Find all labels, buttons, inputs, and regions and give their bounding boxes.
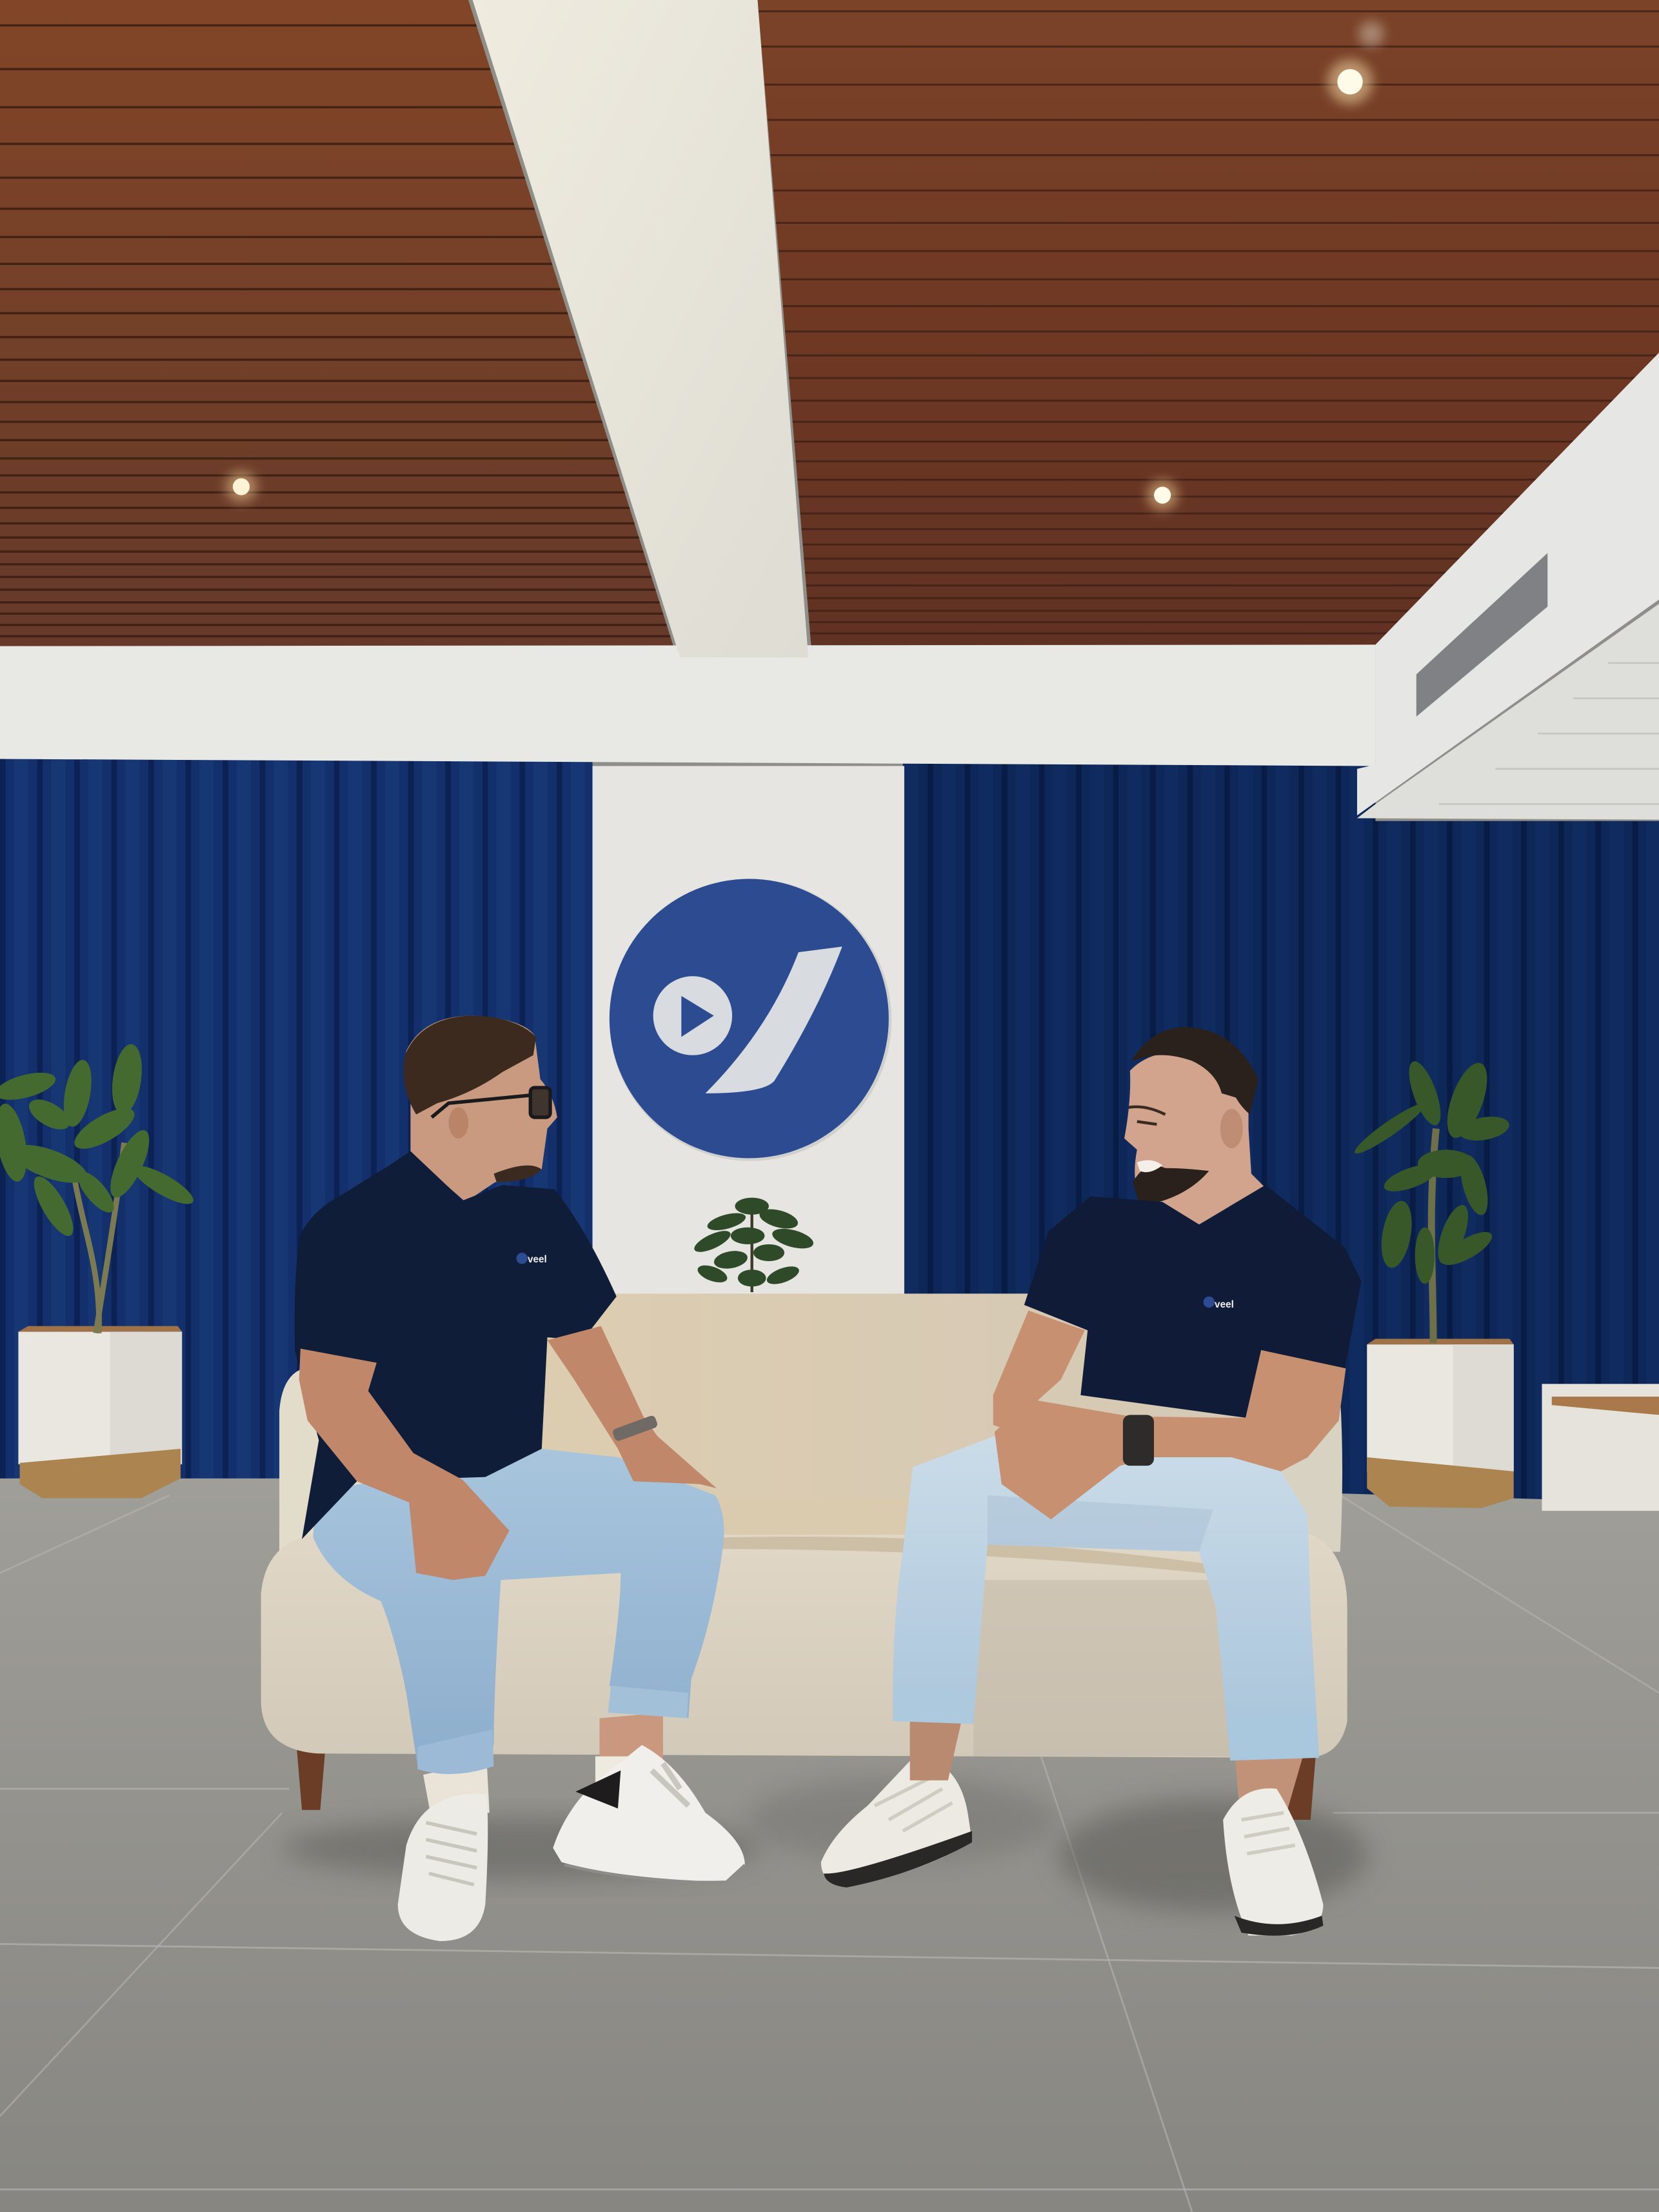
sofa	[261, 1293, 1347, 1820]
eyebrow and eye	[1129, 1107, 1166, 1124]
hair	[404, 1016, 536, 1115]
hair	[1131, 1027, 1258, 1115]
downlights	[226, 21, 1384, 511]
left man far shoe	[398, 1760, 490, 1941]
right man shirt	[1024, 1185, 1362, 1418]
man right	[821, 1027, 1362, 1936]
blue upholstered wall left	[0, 759, 593, 1479]
left man watch	[611, 1415, 659, 1442]
ceiling: left wood slats	[0, 0, 677, 652]
right man jeans	[893, 1436, 1319, 1760]
small plant on panel	[691, 1198, 815, 1292]
right man logo: veel	[1215, 1299, 1234, 1310]
left man neck and head	[404, 1016, 557, 1202]
ear	[448, 1108, 468, 1139]
right man watch	[1123, 1415, 1154, 1466]
sofa right armrest	[1242, 1397, 1342, 1552]
right man left ankle	[910, 1719, 962, 1780]
plant right	[1351, 1058, 1511, 1343]
white ceiling beam	[473, 0, 808, 657]
beard	[493, 1166, 542, 1182]
left man logo: veel	[528, 1254, 547, 1265]
blue upholstered wall right	[903, 762, 1659, 1502]
beard	[1133, 1166, 1209, 1206]
left man shirt	[295, 1151, 617, 1539]
right man head	[1124, 1027, 1266, 1224]
left man arms	[299, 1326, 717, 1580]
ceiling: right wood slats	[748, 0, 1659, 652]
left man logo	[516, 1253, 547, 1265]
right soffit with vent	[1357, 353, 1659, 820]
sofa base	[261, 1535, 1347, 1758]
logo disc	[610, 879, 891, 1161]
planter left	[18, 1326, 182, 1498]
bench far right	[1542, 1384, 1659, 1511]
right man arms	[993, 1311, 1346, 1519]
glasses	[432, 1088, 550, 1117]
centre logo panel	[593, 766, 904, 1295]
right man left shoe	[821, 1753, 972, 1888]
plant left	[0, 1042, 198, 1333]
left man near shoe	[553, 1713, 745, 1882]
white header band	[0, 644, 1375, 766]
man left	[295, 1016, 745, 1941]
planter right	[1367, 1339, 1514, 1508]
ear	[1220, 1109, 1243, 1148]
right man right shoe and ankle	[1223, 1749, 1323, 1936]
left man jeans	[313, 1449, 724, 1774]
smile	[1137, 1160, 1162, 1172]
sofa left armrest	[279, 1368, 423, 1552]
sofa back	[423, 1293, 1269, 1510]
sofa seat	[423, 1498, 1242, 1580]
sofa legs	[296, 1742, 1316, 1820]
right man logo	[1204, 1297, 1234, 1310]
floor	[0, 1467, 1659, 2212]
